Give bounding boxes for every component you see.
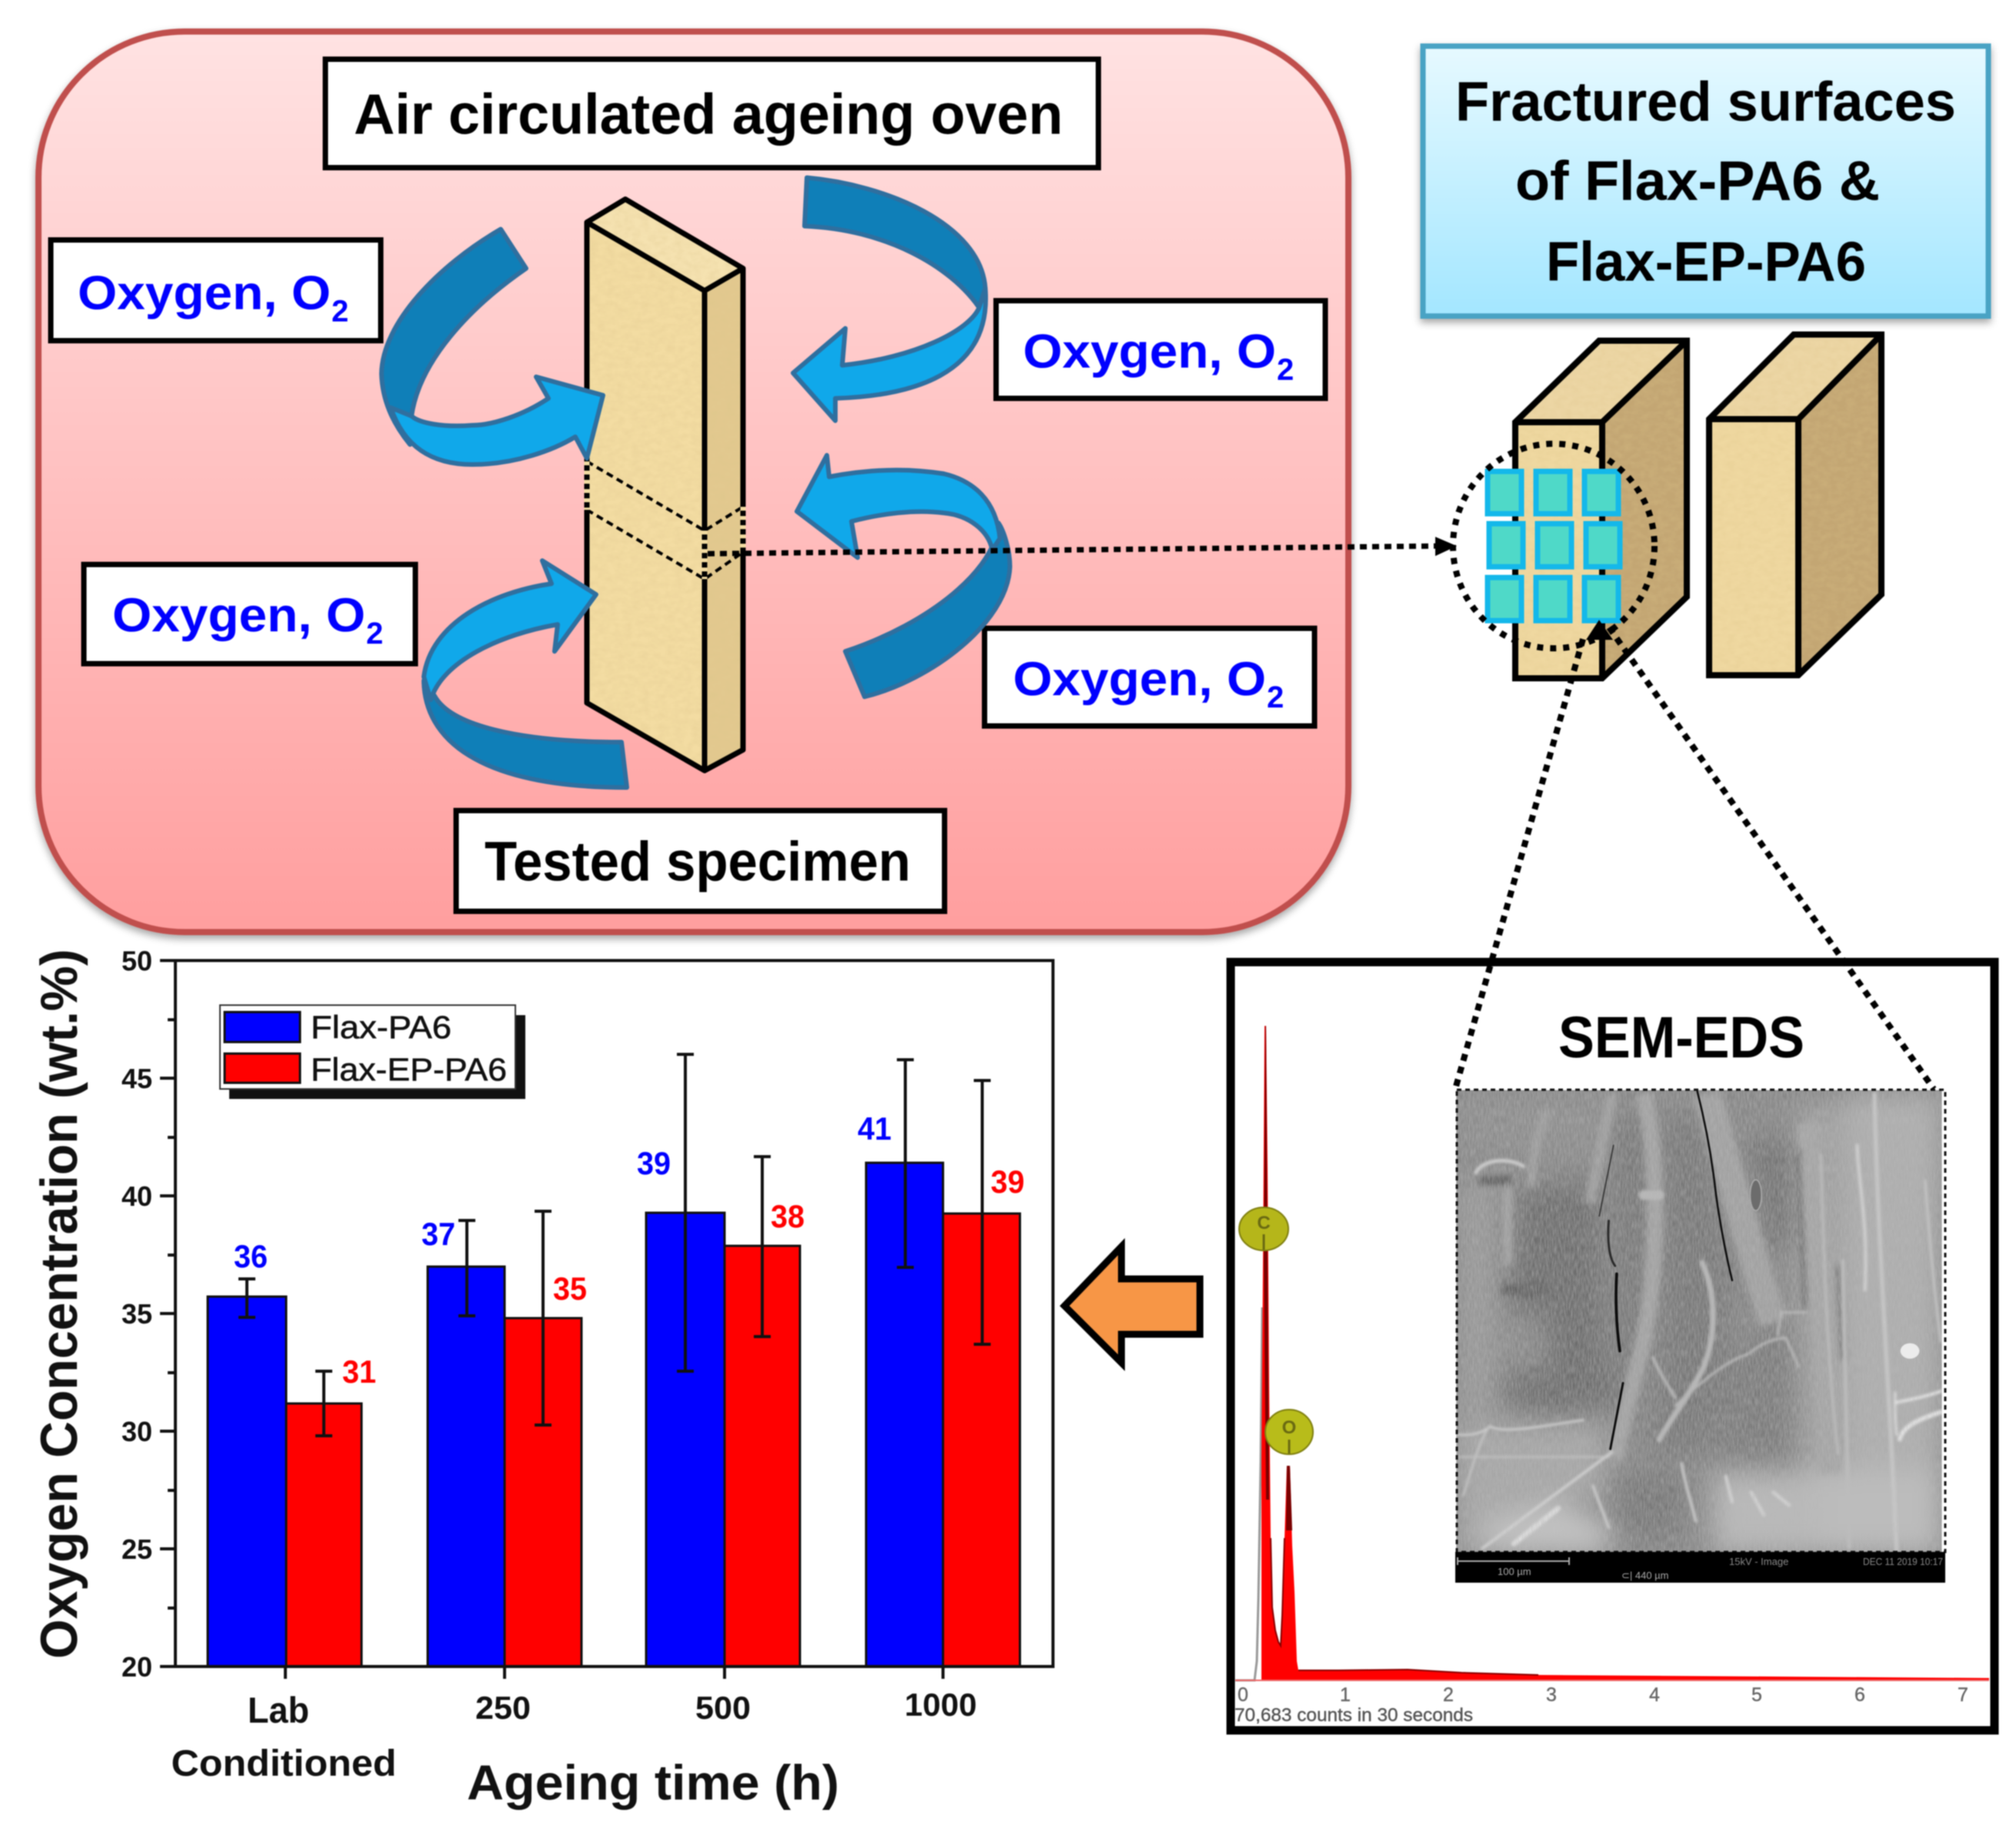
micrograph dashed border <box>1457 1090 1945 1552</box>
y axis title: Oxygen Concentration (wt.%) <box>30 949 88 1659</box>
y axis tick labels <box>122 945 152 1683</box>
label: Oxygen lower left <box>84 564 415 664</box>
label: Oxygen lower right: 2 <box>1267 681 1284 714</box>
heading: Fractured surfaces box <box>1423 46 1988 316</box>
y axis tick labels: 35 <box>122 1298 152 1330</box>
value labels Flax-PA6: 37 <box>422 1216 455 1252</box>
icon: fractured block front <box>1515 341 1687 678</box>
SEM info strip: DEC 11 2019 10:17 <box>1863 1556 1943 1567</box>
legend: Flax-EP-PA6 <box>311 1051 507 1087</box>
value labels Flax-PA6: 41 <box>858 1110 891 1147</box>
y axis tick labels: 40 <box>122 1180 152 1212</box>
tonal regions <box>1457 1094 1941 1553</box>
value labels Flax-EP-PA6: 35 <box>553 1270 587 1307</box>
label: Oxygen upper left: 2 <box>332 295 348 328</box>
chart: EDS spectrum <box>1235 1026 1989 1726</box>
arrow: oxygen flow lower left <box>424 561 627 787</box>
plot frame and ticks <box>160 961 1053 1679</box>
x axis tick labels: 250 <box>475 1690 531 1726</box>
arrow: oxygen flow upper left <box>382 229 603 464</box>
heading: Fractured surfaces box: Flax-EP-PA6 <box>1546 231 1866 293</box>
x axis title: Ageing time (h) <box>467 1755 839 1810</box>
spectrum axis labels: 4 <box>1649 1684 1660 1706</box>
label: Oxygen upper right: Oxygen, O <box>1023 325 1276 378</box>
spectrum axis labels: 5 <box>1751 1684 1762 1706</box>
label: Oxygen lower left: Oxygen, O <box>112 589 365 642</box>
panel: SEM-EDS <box>1231 962 1994 1730</box>
spectrum caption: 70,683 counts in 30 seconds <box>1235 1705 1473 1726</box>
arrow: oxygen flow lower right <box>797 455 1010 697</box>
value labels Flax-PA6: 39 <box>637 1145 671 1181</box>
label: Oxygen upper right: 2 <box>1277 353 1294 387</box>
legend: Flax-PA6 <box>311 1009 452 1045</box>
spectrum axis labels <box>1238 1684 1968 1706</box>
heading: Air circulated ageing oven: Air circulated ageing oven <box>354 82 1063 146</box>
SEM info strip: 15kV - Image <box>1729 1556 1788 1567</box>
element marker: C: C <box>1257 1213 1271 1234</box>
spectrum axis labels: 0 <box>1238 1684 1248 1706</box>
arrow: dotted line from specimen to fractured surface <box>708 537 1457 556</box>
label: Oxygen lower left: 2 <box>366 617 383 651</box>
SEM info strip: ⊂| 440 µm <box>1621 1570 1669 1581</box>
x axis tick labels: 500 <box>695 1690 751 1726</box>
SEM info strip: 100 µm <box>1498 1566 1531 1577</box>
icon: EDS measurement grid <box>1488 471 1620 621</box>
bars: 500 h <box>646 1213 800 1667</box>
image: SEM micrograph <box>1456 1090 1942 1553</box>
y axis tick labels: 25 <box>122 1533 152 1565</box>
arrow: oxygen flow upper right <box>793 178 986 421</box>
label: Oxygen lower right: Oxygen, O <box>1013 653 1266 706</box>
x axis tick labels: 1000 <box>905 1686 977 1723</box>
element marker: O: O <box>1282 1417 1296 1438</box>
y axis tick labels: 30 <box>122 1416 152 1447</box>
legend <box>220 1005 525 1099</box>
label: Oxygen lower right <box>985 628 1315 726</box>
value labels Flax-PA6 <box>234 1110 891 1274</box>
x axis tick labels <box>171 1686 977 1784</box>
label: Oxygen upper right <box>996 301 1325 398</box>
error bars <box>238 1054 991 1436</box>
micrograph grain <box>1456 1090 1942 1553</box>
spectrum axis labels: 3 <box>1546 1684 1557 1706</box>
panel background <box>38 32 1348 932</box>
panel frame <box>1231 962 1994 1730</box>
icon: dotted zoom circle <box>1453 444 1654 648</box>
bright fibres <box>1457 1094 1941 1550</box>
element marker: C <box>1239 1207 1288 1250</box>
x axis tick labels: Conditioned <box>171 1743 397 1784</box>
label: Oxygen upper left: Oxygen, O <box>78 267 331 320</box>
label: Tested specimen: Tested specimen <box>485 831 911 893</box>
element marker: O <box>1265 1410 1313 1454</box>
arrow: dotted lines to SEM image <box>1455 620 1934 1089</box>
y axis tick labels: 50 <box>122 945 152 977</box>
arrow: orange from SEM-EDS to chart <box>1065 1247 1200 1363</box>
x axis tick labels: Lab <box>248 1690 309 1730</box>
heading: Fractured surfaces box: Fractured surfaces <box>1455 72 1956 133</box>
inclusion blob <box>1901 1344 1919 1359</box>
value labels Flax-EP-PA6 <box>342 1164 1025 1390</box>
value labels Flax-EP-PA6: 38 <box>771 1198 805 1234</box>
chart: oxygen concentration bars <box>30 945 1053 1810</box>
heading: SEM-EDS: SEM-EDS <box>1558 1005 1804 1070</box>
cracks <box>1599 1091 1732 1449</box>
bars: Lab Conditioned <box>208 1297 362 1667</box>
bars: 1000 h <box>866 1163 1020 1667</box>
panel: air circulated ageing oven <box>38 32 1348 932</box>
heading: Fractured surfaces box: of Flax-PA6 & <box>1515 151 1880 212</box>
heading: Air circulated ageing oven <box>325 59 1098 168</box>
label: Tested specimen <box>456 811 945 911</box>
y axis tick labels: 20 <box>122 1651 152 1683</box>
icon: fractured block back <box>1709 335 1881 675</box>
SEM info strip <box>1455 1552 1945 1583</box>
spectrum axis labels: 2 <box>1443 1684 1454 1706</box>
y axis tick labels: 45 <box>122 1063 152 1094</box>
label: Oxygen upper left <box>51 240 381 341</box>
icon: tested specimen bar <box>587 199 743 771</box>
spectrum axis labels: 6 <box>1854 1684 1865 1706</box>
spectrum axis labels: 7 <box>1958 1684 1968 1706</box>
value labels Flax-PA6: 36 <box>234 1238 268 1274</box>
value labels Flax-EP-PA6: 39 <box>991 1164 1025 1200</box>
value labels Flax-EP-PA6: 31 <box>342 1354 376 1390</box>
bars: 250 h <box>428 1267 581 1667</box>
spectrum axis labels: 1 <box>1340 1684 1351 1706</box>
